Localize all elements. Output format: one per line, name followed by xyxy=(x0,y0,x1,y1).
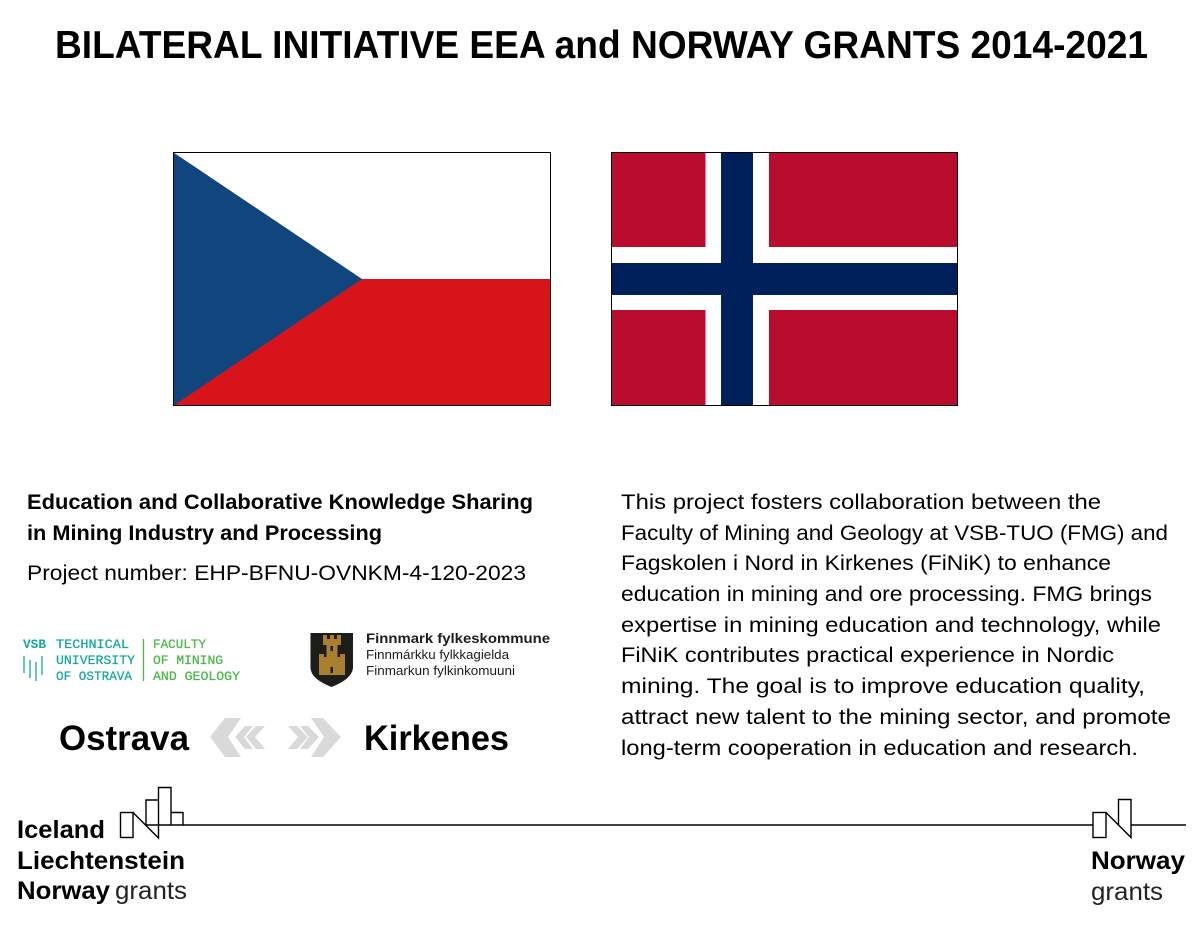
label: Kirkenes: Kirkenes xyxy=(364,719,509,758)
logo: VSB Technical University of Ostrava: VSB xyxy=(23,638,46,652)
logo: Finnmark fylkeskommune: Finmarkun fylkinkomuuni xyxy=(366,663,515,678)
logo: VSB Technical University of Ostrava: AND GEOLOGY xyxy=(153,670,241,684)
project title and number: Education and Collaborative Knowledge Sharing xyxy=(27,491,533,514)
project description xyxy=(621,490,1171,760)
logo: VSB Technical University of Ostrava xyxy=(23,638,241,684)
project description: This project fosters collaboration between the xyxy=(621,490,1101,514)
logo: Iceland Liechtenstein Norway grants: Norway xyxy=(17,877,110,905)
label: Ostrava: Ostrava xyxy=(59,719,190,758)
project title and number: Project number: EHP-BFNU-OVNKM-4-120-2023 xyxy=(27,561,526,585)
logo: VSB Technical University of Ostrava: FACULTY xyxy=(153,638,206,652)
logo: VSB Technical University of Ostrava: TECHNICAL xyxy=(56,638,129,652)
project description: Fagskolen i Nord in Kirkenes (FiNiK) to enhance xyxy=(621,551,1111,575)
logo: Norway grants xyxy=(1091,800,1185,906)
logo: Iceland Liechtenstein Norway grants: Liechtenstein xyxy=(17,847,185,875)
title: BILATERAL INITIATIVE EEA and NORWAY GRANTS 2014-2021 xyxy=(55,24,1148,67)
logo: Finnmark fylkeskommune: Finnmark fylkeskommune xyxy=(366,630,550,646)
icon: right chevrons xyxy=(288,718,341,757)
flag: Czech Republic xyxy=(174,152,550,406)
logo: VSB Technical University of Ostrava: UNIVERSITY xyxy=(56,654,136,668)
project description: FiNiK contributes practical experience in Nordic xyxy=(621,643,1114,667)
footer rule xyxy=(183,824,1186,826)
logo: Iceland Liechtenstein Norway grants xyxy=(17,788,187,905)
logo: Finnmark fylkeskommune xyxy=(310,630,550,687)
icon: left chevrons xyxy=(210,718,265,757)
logo: Finnmark fylkeskommune: Finnmárkku fylkkagielda xyxy=(366,647,510,662)
project description: long-term cooperation in education and research. xyxy=(621,736,1138,760)
project title and number xyxy=(27,491,533,585)
project description: mining. The goal is to improve education quality, xyxy=(621,674,1145,698)
logo: VSB Technical University of Ostrava: OF MINING xyxy=(153,654,223,668)
project description: education in mining and ore processing. FMG brings xyxy=(621,582,1152,606)
project description: Faculty of Mining and Geology at VSB-TUO (FMG) and xyxy=(621,521,1168,545)
logo: Norway grants: grants xyxy=(1091,878,1163,906)
project description: attract new talent to the mining sector, and promote xyxy=(621,705,1171,729)
flag: Norway xyxy=(612,152,958,406)
logo: VSB Technical University of Ostrava: OF OSTRAVA xyxy=(56,670,133,684)
project description: expertise in mining education and technology, while xyxy=(621,613,1161,637)
logo: Norway grants: Norway xyxy=(1091,847,1185,875)
logo: Iceland Liechtenstein Norway grants: grants xyxy=(115,877,187,905)
logo: Iceland Liechtenstein Norway grants: Iceland xyxy=(17,816,105,844)
project title and number: in Mining Industry and Processing xyxy=(27,522,382,545)
